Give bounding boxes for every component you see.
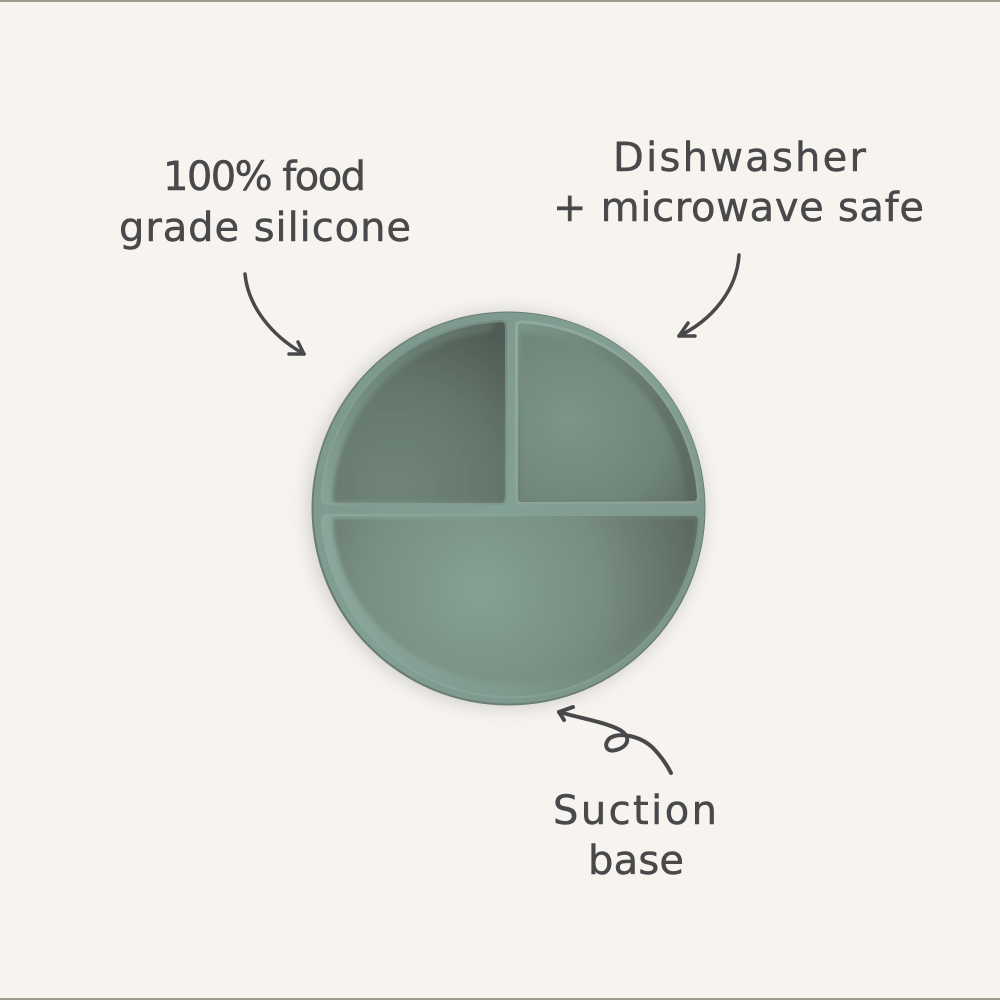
compartment: bottom <box>315 510 707 705</box>
label: 100% food grade silicone <box>119 154 411 251</box>
compartment: top right <box>515 320 700 505</box>
label: Suction base <box>553 788 717 884</box>
label: Dishwasher + microwave safe <box>553 135 924 231</box>
label: Suction base: base <box>588 838 684 884</box>
label: Suction base: Suction <box>553 788 717 834</box>
label: 100% food grade silicone: 100% food <box>163 154 366 200</box>
plate <box>308 300 707 708</box>
arrow: to plate left <box>245 274 304 354</box>
bottom border <box>0 998 1000 1000</box>
compartment: top left <box>321 320 507 505</box>
label: Dishwasher + microwave safe: + microwave safe <box>553 185 924 231</box>
arrow: to plate right <box>679 255 739 336</box>
arrow: to suction base <box>559 707 671 773</box>
label: Dishwasher + microwave safe: Dishwasher <box>613 135 867 181</box>
top border <box>0 0 1000 2</box>
label: 100% food grade silicone: grade silicone <box>119 205 411 251</box>
